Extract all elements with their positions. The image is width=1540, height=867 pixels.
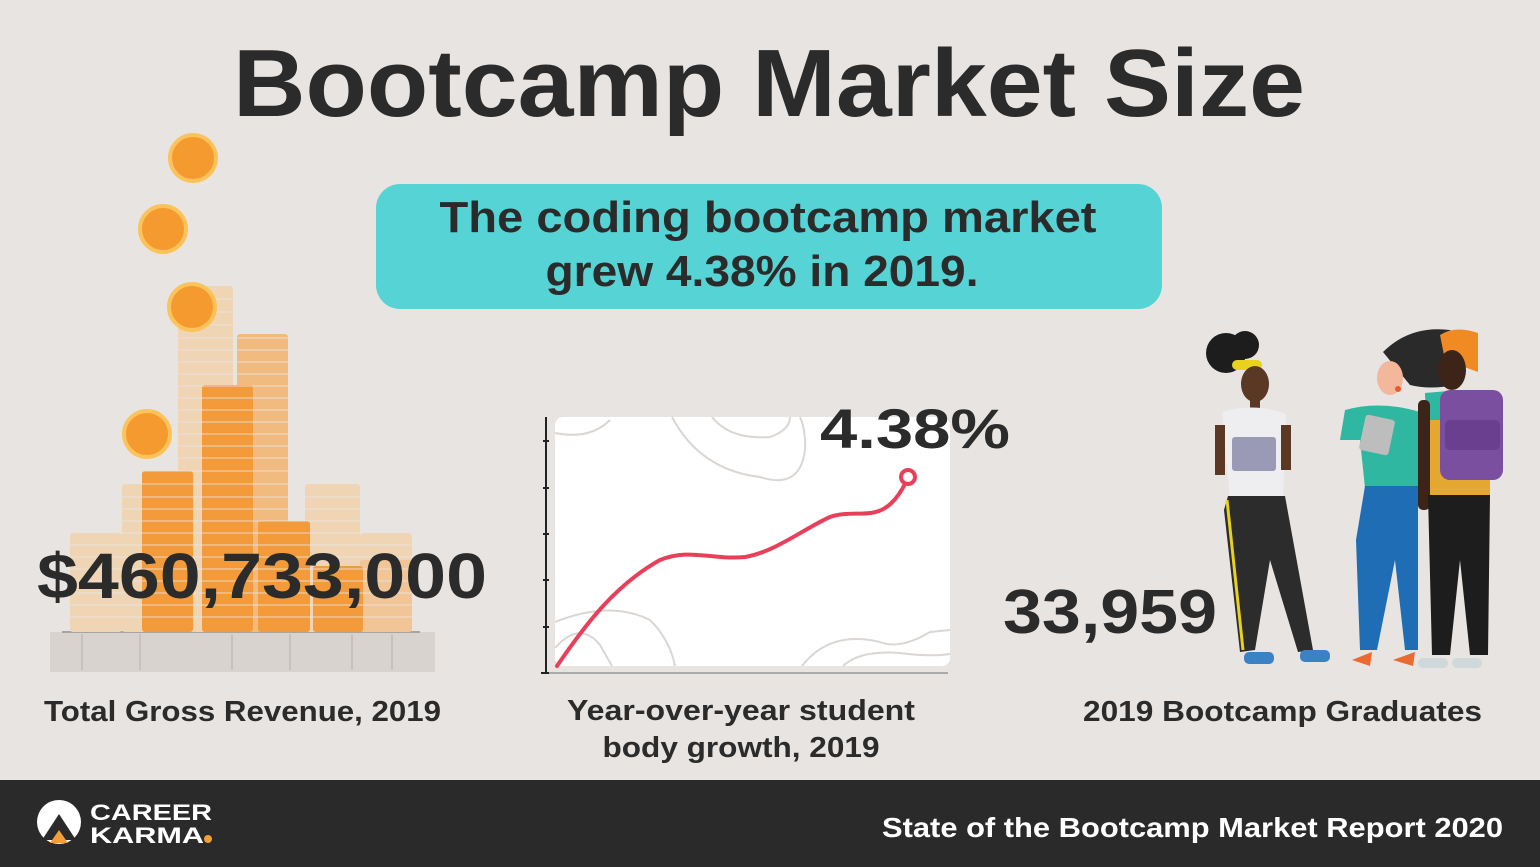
icon: falling coins bbox=[124, 135, 216, 457]
revenue label: Total Gross Revenue, 2019 bbox=[44, 696, 441, 728]
footer text: State of the Bootcamp Market Report 2020 bbox=[882, 812, 1503, 843]
panel: revenue coins illustration bbox=[50, 135, 435, 672]
footer bar bbox=[0, 780, 1540, 867]
logo: Career Karma: CAREER bbox=[90, 800, 212, 825]
illustration: three students bbox=[1206, 329, 1503, 668]
growth label: Year-over-year student bbox=[567, 695, 915, 727]
logo: Career Karma bbox=[37, 800, 212, 848]
revenue figure: $460,733,000 bbox=[37, 540, 487, 612]
title: Bootcamp Market Size bbox=[233, 30, 1305, 137]
person 2 bbox=[1340, 329, 1461, 666]
growth figure: 4.38% bbox=[820, 397, 1010, 460]
graduates figure: 33,959 bbox=[1003, 578, 1217, 647]
growth label bbox=[567, 695, 915, 764]
logo: Career Karma: KARMA bbox=[90, 823, 204, 848]
growth label: body growth, 2019 bbox=[602, 732, 880, 764]
graduates label: 2019 Bootcamp Graduates bbox=[1083, 696, 1482, 728]
callout: market growth: The coding bootcamp market bbox=[440, 193, 1097, 242]
callout: market growth bbox=[376, 184, 1162, 309]
person 3 bbox=[1418, 329, 1503, 668]
person 1 bbox=[1206, 331, 1330, 664]
callout: market growth: grew 4.38% in 2019. bbox=[546, 247, 978, 296]
chart: student body growth line bbox=[541, 417, 950, 673]
